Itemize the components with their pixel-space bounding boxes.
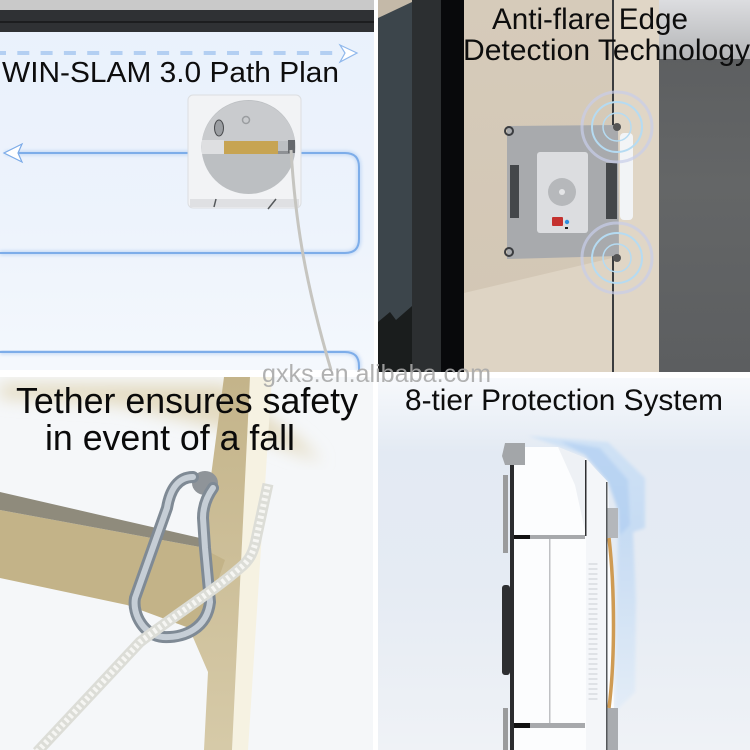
shelf — [0, 492, 225, 632]
path lines — [0, 53, 359, 370]
heading: tether line 1: Tether ensures safety — [16, 380, 358, 421]
panel: edge detection — [378, 0, 750, 372]
heading: edge detection line 1: Anti-flare Edge — [492, 3, 688, 36]
arrow: left — [4, 144, 22, 162]
plant silhouette — [378, 306, 412, 372]
tether line — [291, 150, 331, 370]
panel: path plan — [0, 0, 374, 370]
watermark: gxks.en.alibaba.com — [262, 360, 491, 388]
robot: front view — [505, 123, 633, 262]
robot: top view — [188, 95, 301, 209]
icon: carabiner — [135, 477, 213, 637]
robot: side section — [502, 443, 618, 750]
heading: edge detection line 2: Detection Technology — [463, 34, 750, 67]
blue layers — [528, 436, 645, 712]
icon: chain link — [192, 471, 218, 495]
rope — [37, 484, 268, 750]
heading: path plan: WIN-SLAM 3.0 Path Plan — [2, 57, 339, 89]
heading: tether line 2: in event of a fall — [45, 417, 295, 458]
panel: tether — [0, 377, 373, 750]
icon: sensor waves bottom — [582, 223, 652, 293]
heading: protection system: 8-tier Protection System — [405, 384, 723, 417]
icon: sensor waves top — [582, 92, 652, 162]
arrow: right — [340, 45, 357, 62]
panel: protection system — [378, 378, 750, 750]
